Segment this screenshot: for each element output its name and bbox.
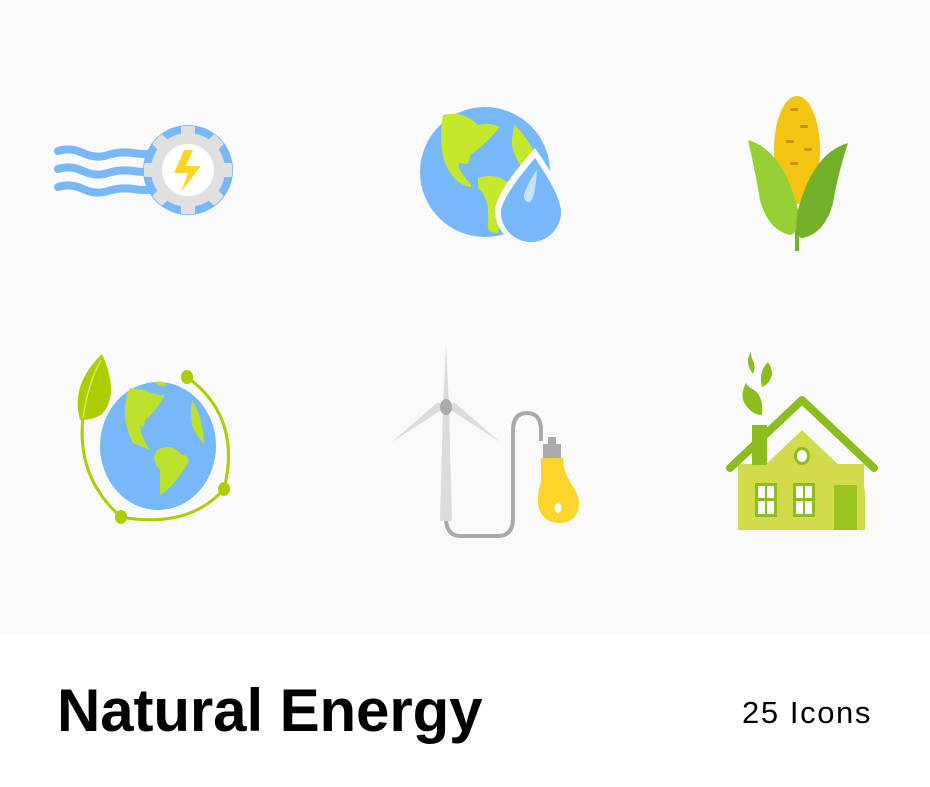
title: Natural Energy [57, 677, 482, 744]
icon count: 25 Icons [742, 695, 872, 730]
icon: eco globe with leaf [78, 354, 230, 524]
icon: eco house [730, 352, 874, 530]
icon: corn [748, 96, 848, 251]
icon: globe with water drop [420, 107, 565, 246]
icon: wind turbine with bulb [392, 344, 579, 536]
icon: hydro gear [58, 125, 233, 215]
